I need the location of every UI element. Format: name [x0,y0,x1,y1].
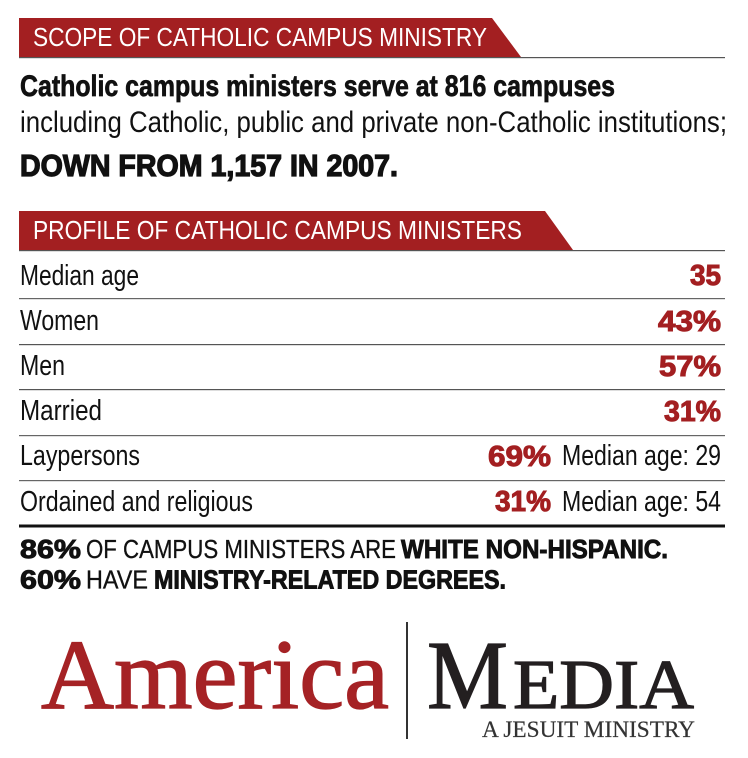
row: ordained and religious [20,486,721,518]
text block: campuses served: DOWN FROM 1,157 IN 2007. [20,148,398,183]
text block: demographics summary: OF CAMPUS MINISTERS ARE [86,534,396,564]
heading banner: profile: PROFILE OF CATHOLIC CAMPUS MINISTERS [33,215,522,245]
row: women: Women [20,305,99,337]
row: laypersons: Laypersons [20,440,140,472]
text block: demographics summary [20,534,668,594]
text block: demographics summary: 60% [20,564,81,594]
heading banner: scope [19,18,725,58]
logo wordmark: Media: M [427,622,508,729]
row: ordained and religious: Ordained and religious [20,486,253,518]
row: married: 31% [664,396,721,428]
row: married: Married [20,395,102,427]
text block: demographics summary: WHITE NON-HISPANIC. [401,534,668,564]
row: men [20,350,721,383]
row: women: 43% [658,306,721,338]
text block: demographics summary: 86% [20,534,81,564]
row: median age [20,260,721,292]
panel: scope of campus ministry [19,18,727,183]
logo: America Media [41,619,695,742]
row: men: Men [20,350,65,382]
row: ordained and religious: 31% [495,486,551,518]
text block: campuses served: Catholic campus ministers serve at 816 campuses [20,70,615,103]
heading banner: profile [19,211,725,251]
row: laypersons: 69% [488,441,551,473]
text block: demographics summary: HAVE [86,564,148,594]
row: women [20,305,721,338]
heading banner: scope: SCOPE OF CATHOLIC CAMPUS MINISTRY [33,22,487,52]
row: men: 57% [659,351,721,383]
row: median age: 35 [690,260,721,292]
row: median age: Median age [20,260,139,292]
row: married [20,395,721,428]
logo wordmark: Media: EDIA [513,647,694,724]
text block: campuses served [20,70,727,183]
logo wordmark: America: America [41,619,389,730]
panel: profile of campus ministers [19,211,725,528]
text block: demographics summary: MINISTRY-RELATED DEGREES. [154,564,506,594]
logo wordmark: Media [427,622,694,729]
row: laypersons [20,440,721,473]
logo tagline: A JESUIT MINISTRY [482,717,695,742]
